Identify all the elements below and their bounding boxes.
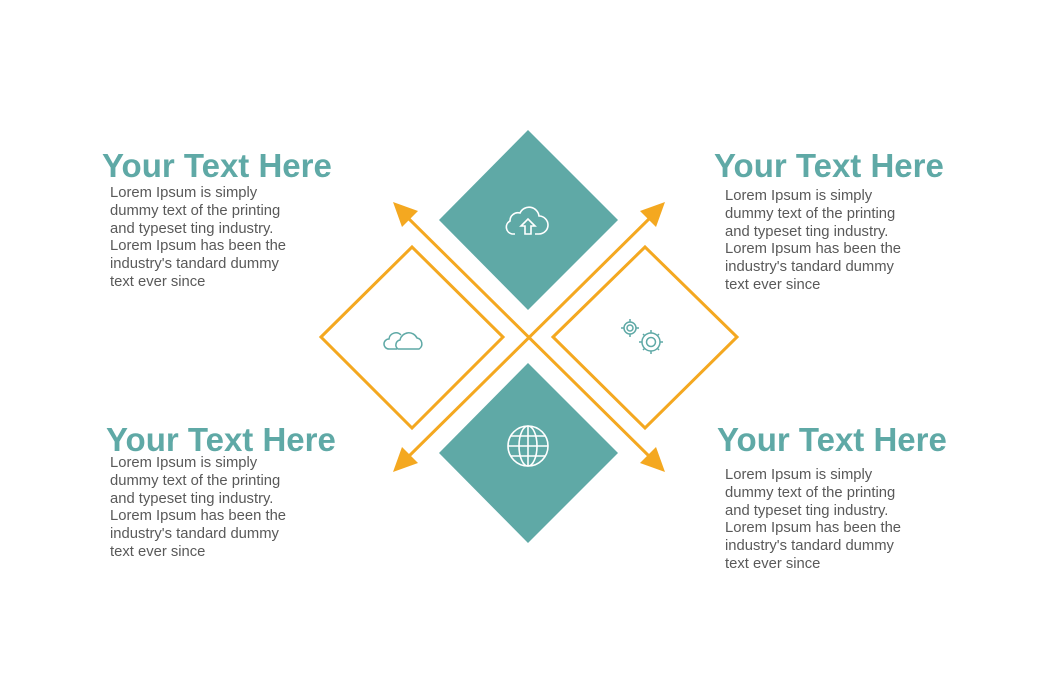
text: bottom left: Lorem Ipsum is simply <box>110 455 257 471</box>
text: top right: Lorem Ipsum is simply <box>725 188 872 204</box>
text: top left <box>110 185 286 290</box>
heading: top left: Your Text Here <box>102 147 332 184</box>
text: bottom right: text ever since <box>725 556 820 572</box>
text: top right: and typeset ting industry. <box>725 224 888 240</box>
text: top left: Lorem Ipsum has been the <box>110 238 286 254</box>
icon: gears <box>621 319 663 354</box>
icon: globe <box>508 426 548 466</box>
text: bottom left: industry's tandard dummy <box>110 526 279 542</box>
text: top left: Lorem Ipsum is simply <box>110 185 257 201</box>
diamond: right outline <box>553 247 737 428</box>
icon: cloud upload <box>506 207 548 234</box>
heading: bottom right: Your Text Here <box>717 421 947 458</box>
text: bottom right <box>725 467 901 572</box>
arrow: diagonal top-right to bottom-left <box>393 202 665 472</box>
text: top right: industry's tandard dummy <box>725 259 894 275</box>
heading: bottom left: Your Text Here <box>106 421 336 458</box>
arrow: diagonal top-left to bottom-right <box>393 202 665 472</box>
diamond: left outline <box>321 247 503 428</box>
text: bottom right: Lorem Ipsum is simply <box>725 467 872 483</box>
text: bottom left <box>110 455 286 560</box>
text: top right: text ever since <box>725 277 820 293</box>
text: top left: text ever since <box>110 274 205 290</box>
diamond: bottom teal <box>439 363 618 543</box>
text: top left: industry's tandard dummy <box>110 256 279 272</box>
text: bottom right: Lorem Ipsum has been the <box>725 520 901 536</box>
text: bottom left: and typeset ting industry. <box>110 491 273 507</box>
heading: top right: Your Text Here <box>714 147 944 184</box>
text: top right: dummy text of the printing <box>725 206 895 222</box>
text: top left: and typeset ting industry. <box>110 221 273 237</box>
text: bottom right: industry's tandard dummy <box>725 538 894 554</box>
text: bottom right: dummy text of the printing <box>725 485 895 501</box>
text: bottom left: Lorem Ipsum has been the <box>110 508 286 524</box>
text: top right <box>725 188 901 293</box>
text: top right: Lorem Ipsum has been the <box>725 241 901 257</box>
diamond: top teal <box>439 130 618 310</box>
text: bottom right: and typeset ting industry. <box>725 503 888 519</box>
text: bottom left: text ever since <box>110 544 205 560</box>
text: bottom left: dummy text of the printing <box>110 473 280 489</box>
text: top left: dummy text of the printing <box>110 203 280 219</box>
icon: clouds <box>384 333 422 349</box>
